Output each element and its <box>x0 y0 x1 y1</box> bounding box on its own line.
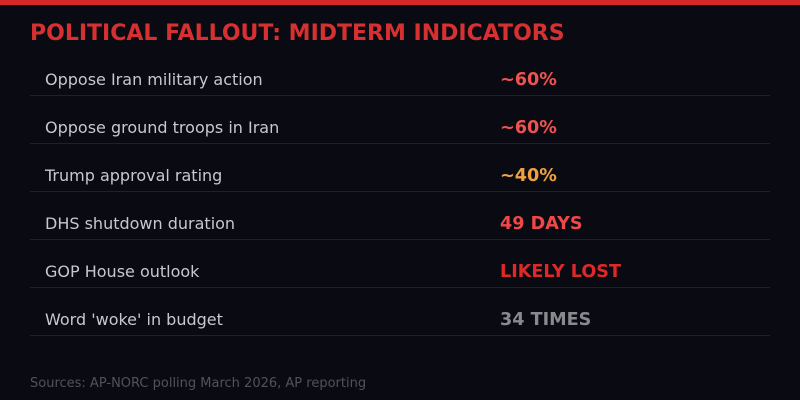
row: gop house outlook: LIKELY LOST <box>500 262 621 282</box>
row: trump approval <box>30 143 770 192</box>
title: POLITICAL FALLOUT: MIDTERM INDICATORS <box>30 21 565 46</box>
row: oppose iran military action <box>30 47 770 96</box>
row: woke in budget: Word 'woke' in budget <box>45 310 223 329</box>
row: oppose ground troops: ~60% <box>500 118 557 138</box>
row: dhs shutdown: 49 DAYS <box>500 214 583 234</box>
row: oppose ground troops <box>30 95 770 144</box>
row: gop house outlook <box>30 239 770 288</box>
row: oppose ground troops: Oppose ground troops in Iran <box>45 118 279 137</box>
row: dhs shutdown <box>30 191 770 240</box>
row: woke in budget: 34 TIMES <box>500 310 591 330</box>
row: oppose iran military action: ~60% <box>500 70 557 90</box>
source note: Sources: AP-NORC polling March 2026, AP reporting <box>30 376 366 391</box>
row: trump approval: Trump approval rating <box>45 166 222 185</box>
row: oppose iran military action: Oppose Iran military action <box>45 70 263 89</box>
row: woke in budget <box>30 287 770 336</box>
row: gop house outlook: GOP House outlook <box>45 262 199 281</box>
row: trump approval: ~40% <box>500 166 557 186</box>
top accent bar <box>0 0 800 5</box>
row: dhs shutdown: DHS shutdown duration <box>45 214 235 233</box>
